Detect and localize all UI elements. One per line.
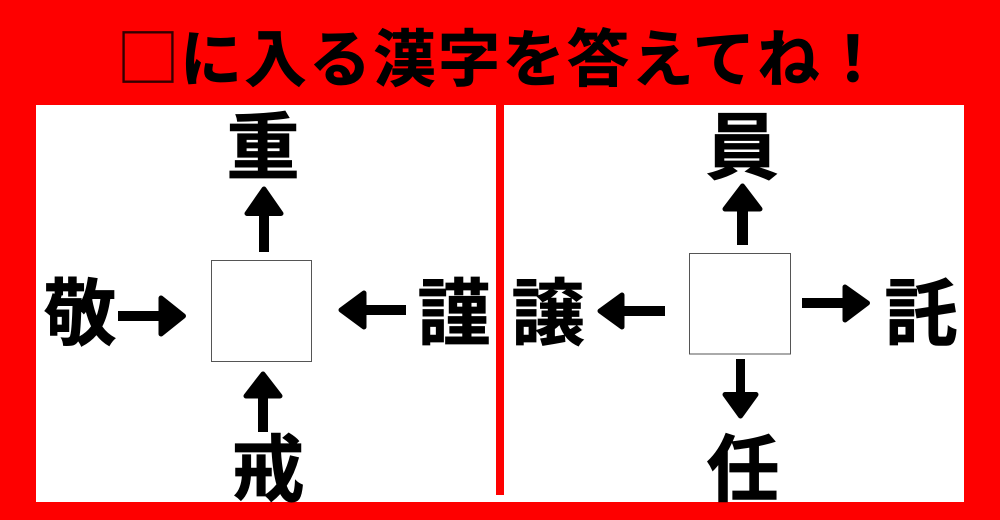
panel: right puzzle	[512, 89, 958, 517]
title: □	[116, 8, 180, 100]
kanji bottom: 任: 任	[706, 411, 780, 517]
arrow left from box	[600, 295, 665, 327]
kanji top: 重: 重	[226, 89, 300, 195]
arrow up toward box	[246, 374, 280, 432]
divider	[496, 105, 504, 495]
arrow right from box	[802, 287, 868, 320]
title: に入る漢字を答えてね！	[180, 9, 886, 99]
panel: white quiz area	[36, 105, 964, 502]
arrow up from box	[725, 186, 760, 245]
kanji left: 譲: 譲	[512, 255, 584, 361]
arrow left toward box	[341, 293, 406, 327]
kanji right: 謹: 謹	[418, 255, 490, 361]
panel: left puzzle	[44, 89, 490, 517]
blank box left	[212, 260, 312, 362]
arrow right toward box	[118, 298, 184, 334]
arrow up into top kanji	[247, 189, 281, 252]
arrow down from box	[725, 359, 756, 416]
kanji left: 敬: 敬	[44, 255, 116, 361]
kanji bottom: 戒: 戒	[232, 411, 304, 517]
kanji top: 員: 員	[706, 89, 778, 195]
kanji right: 託: 託	[884, 255, 958, 361]
blank box right	[690, 254, 790, 354]
